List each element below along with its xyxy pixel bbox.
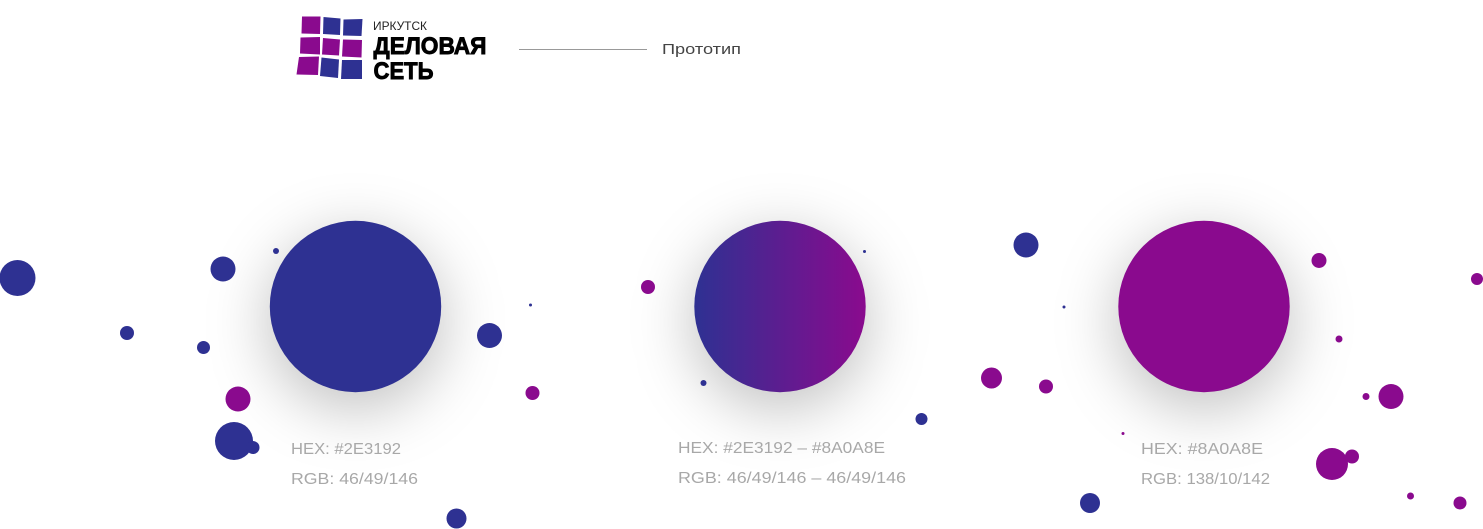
logo wordmark: ДЕЛОВАЯ (374, 33, 486, 60)
swatch shadow (692, 234, 868, 410)
scattered dots: middle group (641, 250, 928, 425)
blue colour codes: HEX: #2E3192 (291, 441, 401, 458)
blue colour codes (291, 441, 418, 488)
purple circle (1118, 221, 1290, 392)
gradient colour codes: HEX: #2E3192 – #8A0A8E (678, 440, 885, 457)
logo mark: grid of squares (296, 16, 362, 79)
gradient colour codes (678, 440, 906, 487)
swatch shadow (268, 234, 444, 410)
blue circle (270, 221, 441, 392)
logo wordmark: ИРКУТСК (373, 21, 427, 33)
logo wordmark: СЕТЬ (374, 58, 434, 85)
panel: blue swatch (268, 221, 444, 488)
purple colour codes (1141, 441, 1270, 488)
blue colour codes: RGB: 46/49/146 (291, 471, 418, 488)
gradient circle (694, 221, 866, 392)
prototype label: Прототип (662, 41, 741, 58)
purple colour codes: RGB: 138/10/142 (1141, 471, 1270, 488)
logo (296, 16, 486, 85)
scattered dots: right group (981, 232, 1483, 513)
divider line to prototype label (519, 49, 647, 50)
swatch shadow (1116, 234, 1292, 410)
panel: gradient swatch (678, 221, 906, 487)
logo wordmark (373, 21, 486, 85)
scattered dots: left group (0, 248, 540, 528)
gradient colour codes: RGB: 46/49/146 – 46/49/146 (678, 470, 906, 487)
purple colour codes: HEX: #8A0A8E (1141, 441, 1263, 458)
panel: purple swatch (1116, 221, 1292, 488)
